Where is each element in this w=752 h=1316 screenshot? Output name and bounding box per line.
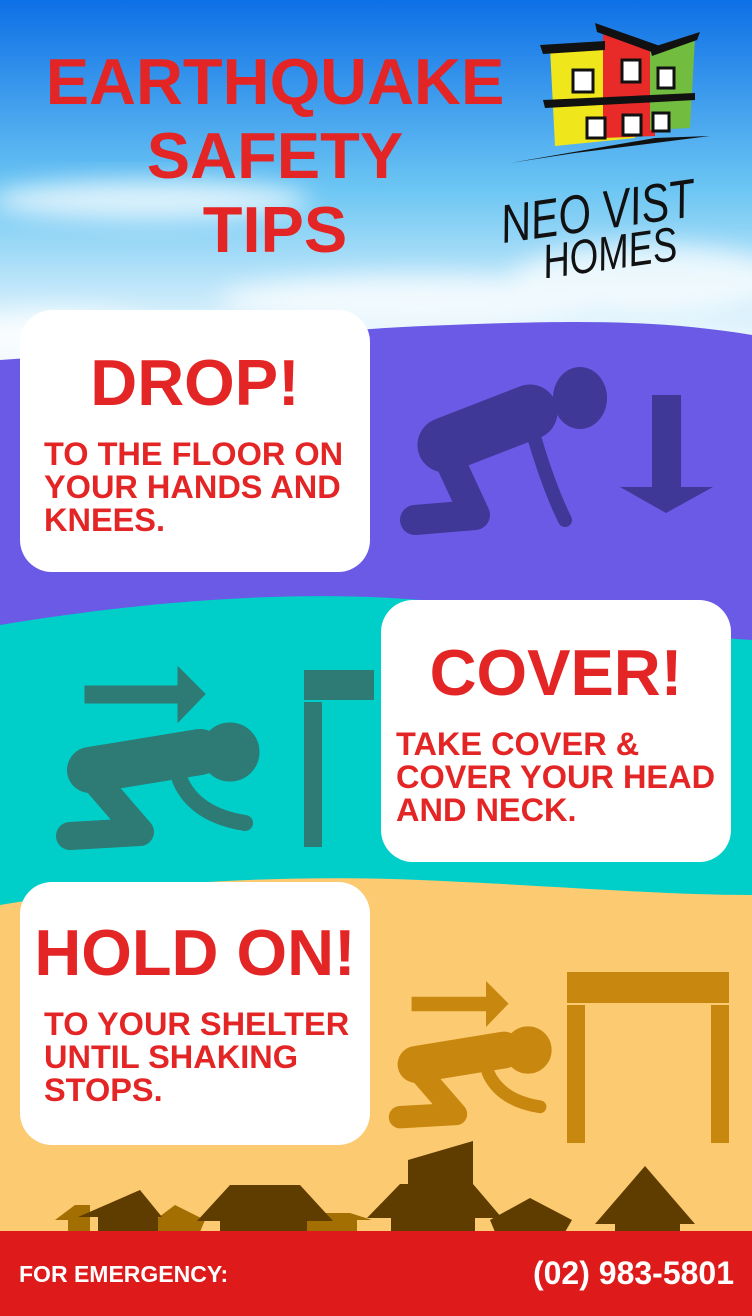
text: drop: TO THE FLOOR ON (44, 436, 343, 472)
text: hold on: UNTIL SHAKING (44, 1039, 298, 1075)
title (46, 45, 504, 266)
panel: drop (20, 310, 370, 572)
icon: dropping figure and down arrow (400, 367, 713, 535)
text: hold on (44, 1006, 349, 1108)
footer phone number: (02) 983-5801 (533, 1255, 734, 1291)
title: EARTHQUAKE (46, 45, 504, 118)
text: drop: KNEES. (44, 502, 165, 538)
text: cover (396, 726, 715, 828)
title: TIPS (203, 193, 347, 266)
title: SAFETY (147, 119, 403, 192)
text: drop: YOUR HANDS AND (44, 469, 341, 505)
footer: emergency bar (0, 1231, 752, 1316)
heading: cover: COVER! (430, 636, 682, 709)
panel: cover (381, 600, 731, 862)
text: cover: COVER YOUR HEAD (396, 759, 715, 795)
footer label: FOR EMERGENCY: (19, 1261, 228, 1287)
skyline houses (55, 1141, 695, 1231)
heading: hold on: HOLD ON! (34, 916, 356, 989)
text: drop (44, 436, 343, 538)
text: cover: TAKE COVER & (396, 726, 639, 762)
logo: Neo Vist Homes (497, 23, 710, 278)
text: hold on: STOPS. (44, 1072, 163, 1108)
heading: drop: DROP! (90, 346, 300, 419)
text: hold on: TO YOUR SHELTER (44, 1006, 349, 1042)
panel: hold on (20, 882, 370, 1145)
text: cover: AND NECK. (396, 792, 577, 828)
